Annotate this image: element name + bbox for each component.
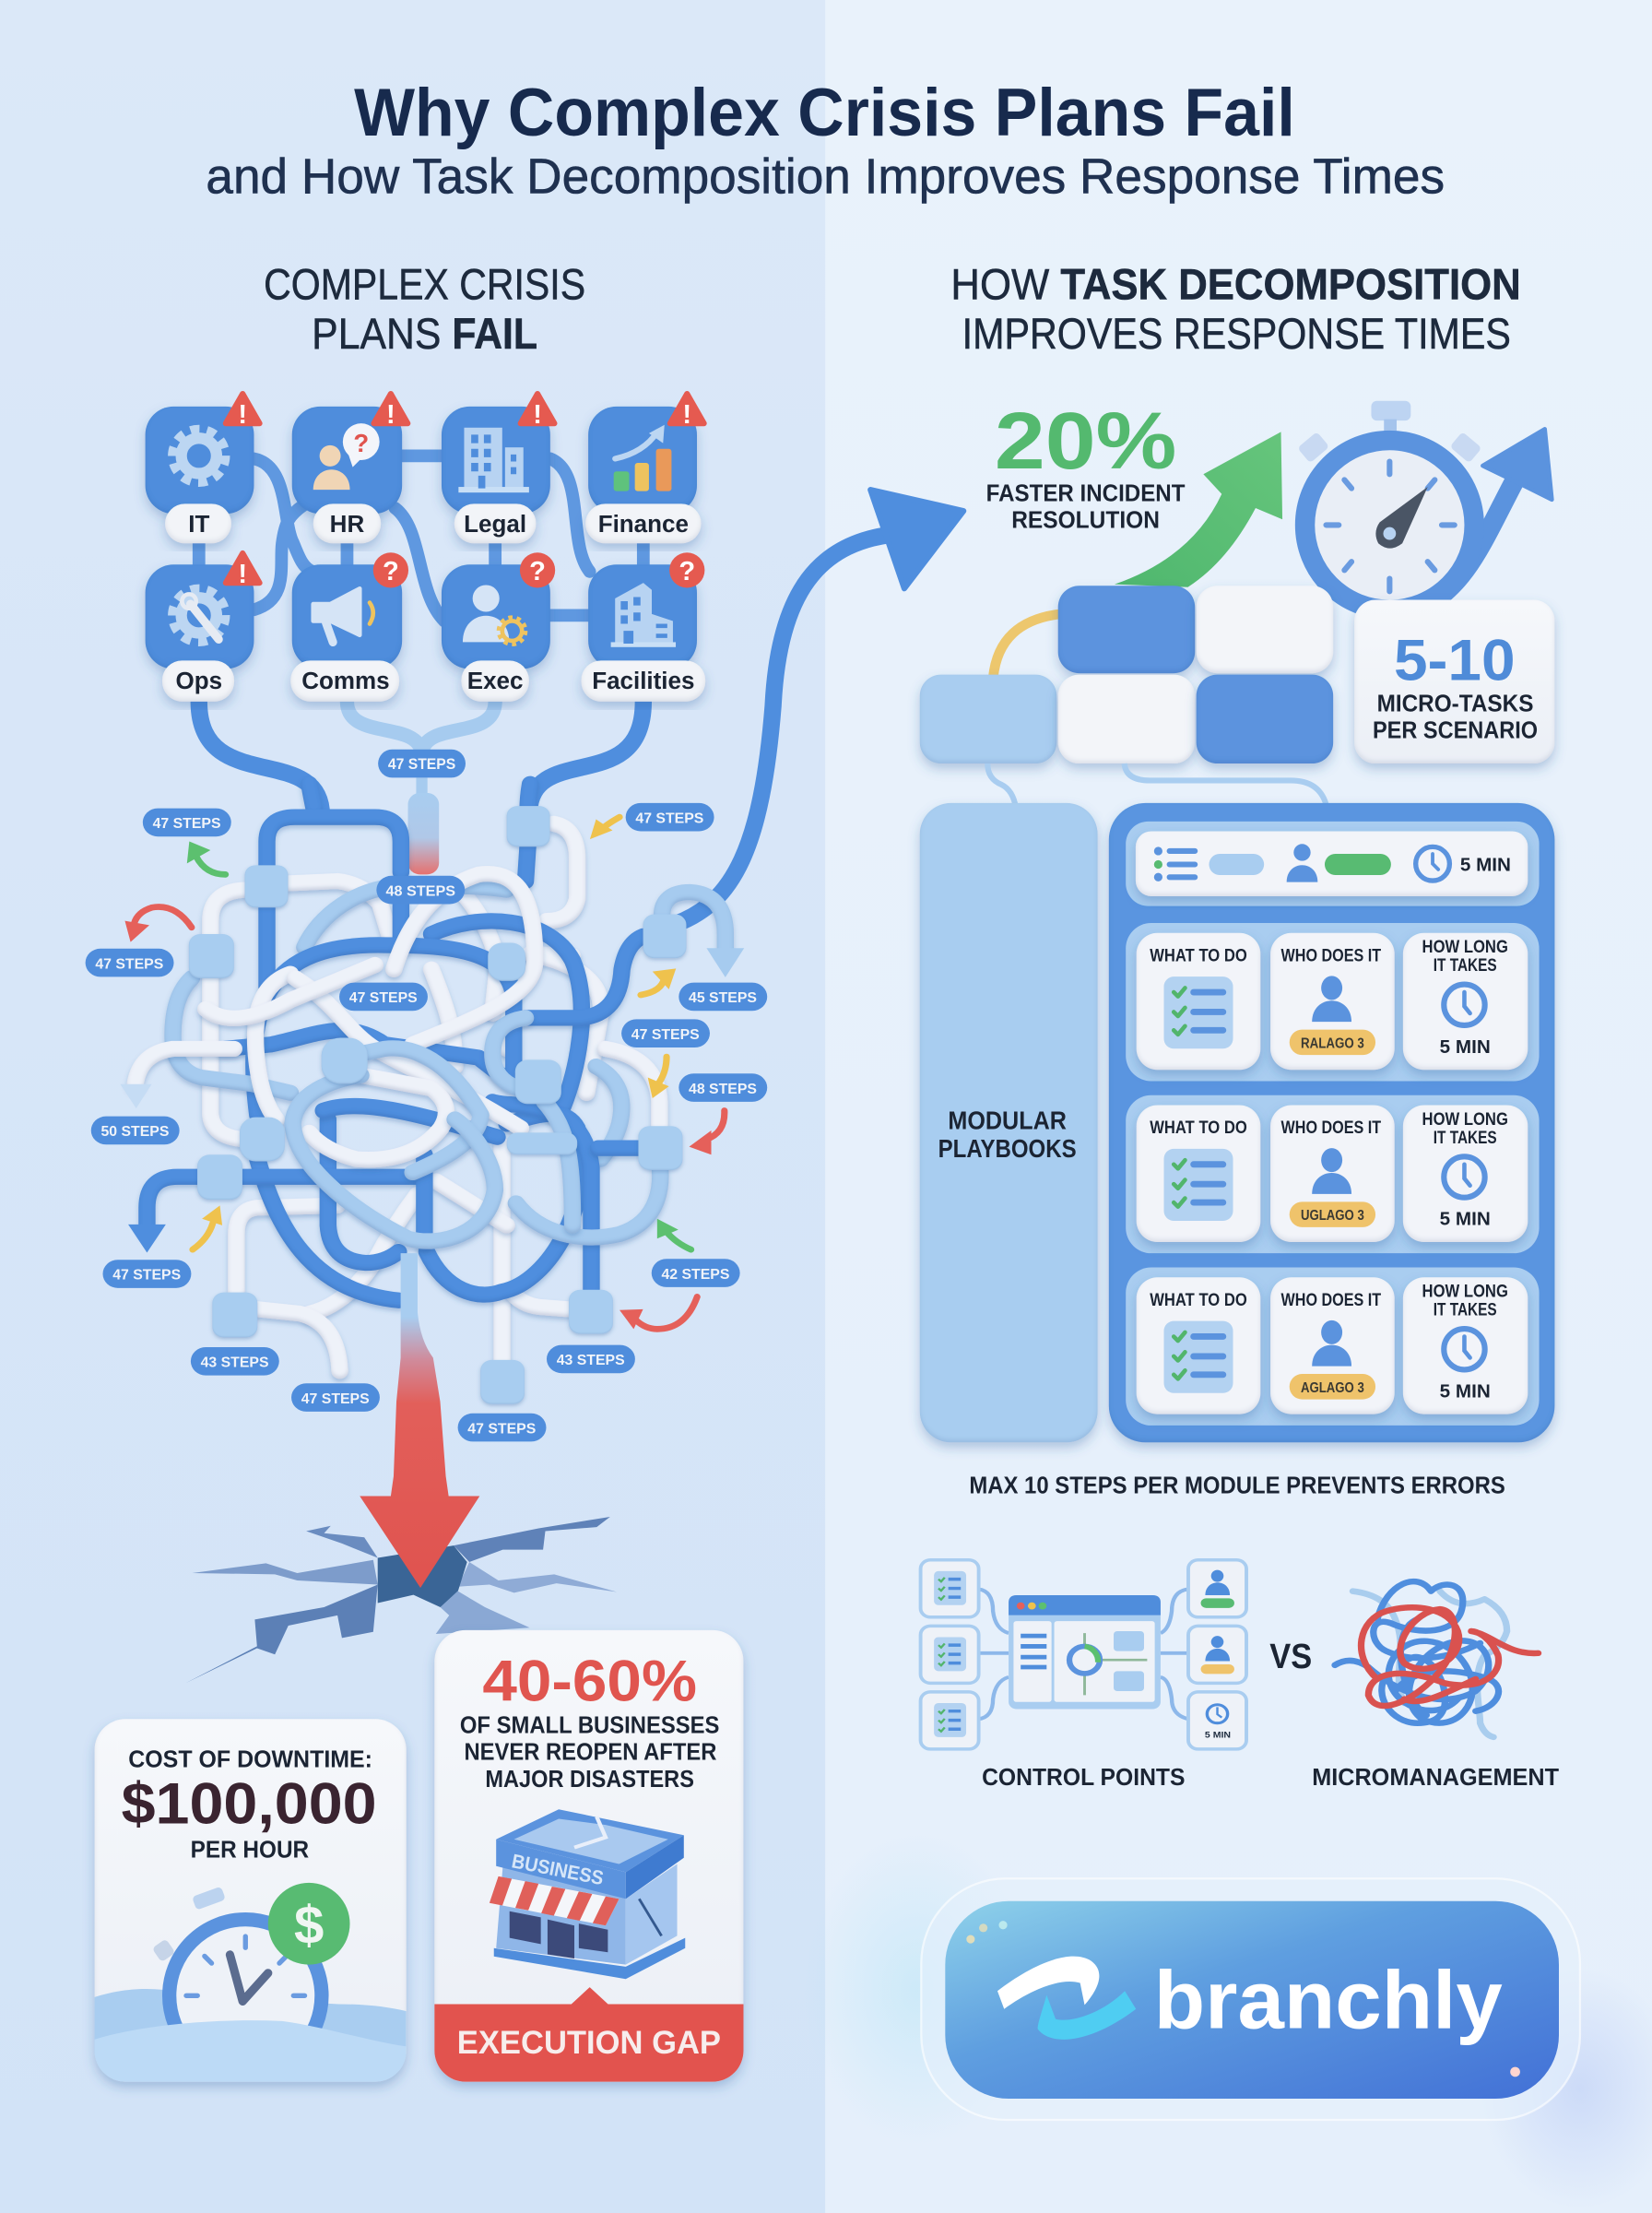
step count labels: 47 STEPS: [301, 1391, 370, 1407]
step count labels: 47 STEPS: [467, 1422, 536, 1437]
icon: Legal: Legal: [464, 510, 526, 538]
panel: playbook modules: [1109, 803, 1554, 1442]
playbook row 3: [1126, 1267, 1540, 1426]
panel: modular playbooks: [920, 803, 1098, 1442]
logo mark: [997, 1957, 1136, 2040]
icon: Ops: [146, 553, 260, 702]
labels: control points and micromanagement: [982, 1763, 1559, 1791]
heading: complex crisis plans fail: COMPLEX CRISIS: [264, 260, 585, 309]
icon: IT: [146, 394, 260, 543]
chart: tangled process tubes: [86, 784, 767, 1441]
playbook row 2: UGLAGO 3: [1301, 1207, 1364, 1224]
icon: Ops: Ops: [175, 667, 222, 694]
panel: modular playbooks: MODULAR: [948, 1106, 1067, 1134]
background: right panel: [825, 0, 1652, 2213]
panel: modular playbooks: PLAYBOOKS: [938, 1134, 1077, 1163]
arrow: escape route from tangle to task decomposition: [674, 490, 963, 925]
icon: IT: IT: [188, 510, 209, 538]
control tiles right: [1188, 1560, 1246, 1749]
tangle: dark tubes: [147, 784, 665, 1300]
playbook header row: 5 MIN: [1460, 854, 1511, 875]
text: 40-60 percent: MAJOR DISASTERS: [485, 1765, 694, 1793]
panel: business closure statistic: [423, 1630, 761, 2089]
step count labels: 47 STEPS: [153, 817, 221, 832]
playbook row 1: HOW LONG: [1422, 938, 1508, 957]
labels: control points and micromanagement: MICROMANAGEMENT: [1312, 1763, 1559, 1791]
card: 5-10 micro-tasks: 5-10: [1394, 629, 1516, 693]
playbook row 1: IT TAKES: [1434, 956, 1497, 976]
title: Why Complex Crisis Plans Fail: [354, 74, 1295, 150]
playbook row 3: WHO DOES IT: [1281, 1291, 1381, 1310]
playbook row 3: HOW LONG: [1422, 1283, 1508, 1302]
panel: department icons: [146, 394, 705, 702]
playbook row 2: WHO DOES IT: [1281, 1118, 1381, 1138]
connectors: blocks to playbooks: [987, 763, 1326, 808]
text: cost of downtime: [122, 1745, 377, 1863]
control tiles left: [921, 1560, 979, 1749]
logo: branchly: branchly: [1154, 1954, 1503, 2045]
playbook row 2: 5 MIN: [1440, 1209, 1491, 1230]
step count labels: 47 STEPS: [112, 1268, 181, 1284]
icon: HR: [292, 394, 407, 543]
playbook row 3: IT TAKES: [1434, 1301, 1497, 1320]
crack in the ground: [185, 1517, 617, 1683]
icon: HR: !: [386, 400, 395, 430]
card: 5-10 micro-tasks: PER SCENARIO: [1373, 716, 1538, 744]
icon: Comms: ?: [383, 557, 399, 586]
banner: execution gap: EXECUTION GAP: [457, 2025, 721, 2061]
labels: control points and micromanagement: CONTROL POINTS: [982, 1763, 1185, 1791]
department connector network: [199, 456, 643, 816]
step count labels: 42 STEPS: [661, 1267, 729, 1283]
dashboard window: [1009, 1595, 1161, 1710]
heading: how task decomposition improves response times: HOW TASK DECOMPOSITION: [950, 260, 1521, 309]
icon: Ops: !: [238, 560, 247, 589]
step count labels: 50 STEPS: [100, 1125, 169, 1140]
heading: complex crisis plans fail: PLANS FAIL: [312, 310, 537, 359]
text: 40-60 percent: [460, 1649, 719, 1793]
stat: 20 percent faster: FASTER INCIDENT: [986, 479, 1186, 506]
tangle: back tubes: [210, 793, 659, 1371]
icon: Comms: [290, 552, 408, 702]
icon: cracked business building: BUSINESS: [510, 1850, 606, 1889]
playbook row 2: IT TAKES: [1434, 1129, 1497, 1148]
icon: sinking stopwatch with dollar: $: [294, 1896, 324, 1956]
step count labels: 47 STEPS: [349, 991, 418, 1006]
icon: Facilities: ?: [678, 557, 695, 586]
diagram: control points: [921, 1560, 1246, 1749]
playbook row 1: WHAT TO DO: [1150, 946, 1247, 965]
step count labels: 47 STEPS: [635, 811, 703, 826]
connector: yellow arc between blocks: [993, 614, 1061, 678]
caption: max 10 steps: MAX 10 STEPS PER MODULE PREVENTS ERRORS: [969, 1471, 1505, 1498]
icon: stopwatch: [1297, 401, 1481, 609]
stat: 20 percent faster: [986, 396, 1186, 533]
playbook row 1: RALAGO 3: [1301, 1035, 1364, 1051]
arrow: red failure arrow into crack: [360, 1253, 479, 1588]
arrow: green improvement arrow: [1115, 432, 1282, 587]
playbook row 1: 5 MIN: [1440, 1036, 1491, 1058]
icon: Finance: Finance: [598, 510, 689, 538]
tangle: front tubes: [136, 874, 726, 1241]
tangle: arrowheads: [120, 948, 744, 1253]
card: 5-10 micro-tasks: MICRO-TASKS: [1377, 689, 1533, 716]
playbook row 2: WHAT TO DO: [1150, 1118, 1247, 1138]
diagram: micromanagement tangle: [1335, 1581, 1539, 1737]
heading: complex crisis plans fail: [264, 260, 585, 359]
playbook row 1: WHO DOES IT: [1281, 946, 1381, 965]
title: [206, 74, 1445, 205]
playbook row 2: HOW LONG: [1422, 1110, 1508, 1130]
text: 40-60 percent: 40-60%: [482, 1649, 697, 1713]
icon: Exec: Exec: [467, 667, 524, 694]
arrow: blue arrow behind stopwatch: [1418, 429, 1552, 609]
text: 40-60 percent: OF SMALL BUSINESSES: [460, 1711, 719, 1739]
logo: branchly: [921, 1878, 1580, 2120]
icon: Facilities: [581, 552, 705, 702]
panel: cost of downtime: [95, 1719, 407, 2089]
tangle: junction nodes: [189, 806, 686, 1404]
background: left panel: [0, 0, 825, 2213]
card: 5-10 micro-tasks: [1354, 600, 1554, 763]
playbook row 3: 5 MIN: [1440, 1380, 1491, 1402]
control tiles right: 5 MIN: [1205, 1731, 1231, 1740]
icon: Facilities: Facilities: [592, 667, 694, 694]
icon: Legal: !: [533, 400, 542, 430]
step count labels: 47 STEPS: [95, 957, 163, 972]
step count labels: 45 STEPS: [689, 991, 757, 1006]
icon: Finance: !: [682, 400, 691, 430]
banner: execution gap: [434, 1987, 743, 2082]
step count labels: [86, 803, 767, 1441]
playbook row 3: WHAT TO DO: [1150, 1291, 1247, 1310]
text: cost of downtime: PER HOUR: [191, 1835, 309, 1863]
step count labels: 48 STEPS: [689, 1082, 757, 1097]
icon: Exec: [442, 552, 555, 702]
step count labels: 47 STEPS: [631, 1027, 700, 1043]
micro-task blocks: [920, 586, 1333, 763]
title: and How Task Decomposition Improves Response Times: [206, 150, 1445, 205]
step count labels: 43 STEPS: [201, 1355, 269, 1370]
heading: how task decomposition improves response times: IMPROVES RESPONSE TIMES: [962, 310, 1511, 359]
icon: IT: !: [238, 400, 247, 430]
step count labels: 43 STEPS: [557, 1354, 625, 1368]
step count labels: 48 STEPS: [386, 884, 455, 899]
label: 47 steps merge pill: [378, 750, 466, 777]
icon: sinking stopwatch with dollar: [95, 1883, 407, 2089]
small arrows: [124, 817, 725, 1329]
icon: Finance: [585, 394, 704, 543]
icon: Comms: Comms: [301, 667, 390, 694]
playbook row 2: [1126, 1095, 1540, 1253]
logo glow: [804, 1835, 1652, 2208]
icon: Legal: [442, 394, 554, 543]
playbook row 1: [1126, 923, 1540, 1081]
icon: HR: HR: [330, 510, 364, 538]
label: 47 steps merge pill: 47 STEPS: [388, 755, 455, 773]
text: vs: VS: [1269, 1637, 1312, 1676]
text: cost of downtime: $100,000: [122, 1772, 377, 1837]
playbook row 3: AGLAGO 3: [1301, 1379, 1364, 1396]
stat: 20 percent faster: RESOLUTION: [1011, 505, 1160, 533]
heading: how task decomposition improves response times: [950, 260, 1521, 359]
text: cost of downtime: COST OF DOWNTIME:: [128, 1745, 372, 1772]
icon: cracked business building: [490, 1809, 685, 1979]
icon: Exec: ?: [529, 557, 546, 586]
icon: HR: ?: [353, 429, 369, 457]
text: 40-60 percent: NEVER REOPEN AFTER: [464, 1738, 717, 1766]
playbook header row: [1126, 822, 1540, 906]
stat: 20 percent faster: 20%: [995, 396, 1176, 486]
